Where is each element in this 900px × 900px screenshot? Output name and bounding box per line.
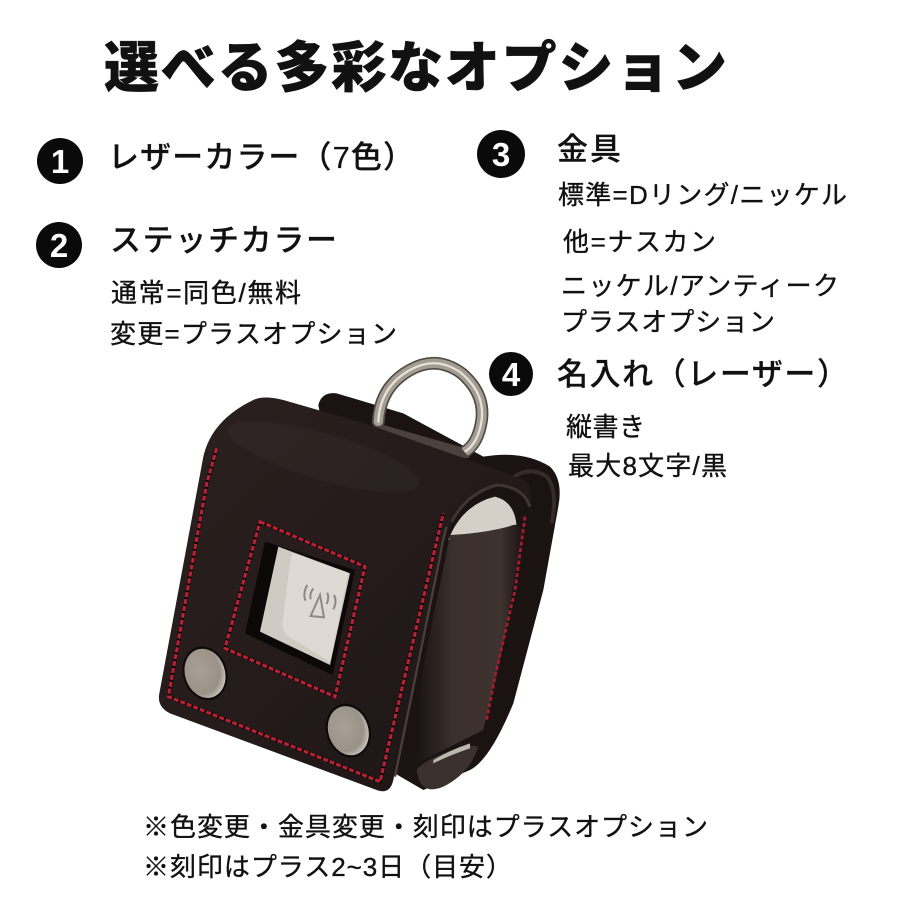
badge 2	[36, 222, 82, 268]
outer stitching	[168, 448, 443, 782]
snap button left	[176, 641, 234, 706]
stitch text: normal: 通常=同色/無料	[111, 278, 301, 308]
badge 4	[489, 352, 533, 396]
fittings text: standard: 標準=Dリング/ニッケル	[558, 180, 847, 210]
back strap	[318, 393, 560, 790]
badge 4: 4	[502, 356, 521, 393]
antenna icon	[304, 585, 336, 617]
engraving text: vertical: 縦書き	[566, 412, 645, 442]
badge 1	[37, 138, 83, 184]
badge 3	[477, 130, 525, 178]
side pocket	[416, 525, 522, 763]
badge 1: 1	[51, 143, 69, 180]
flap highlight	[221, 407, 426, 507]
section 2: stitch colour	[36, 222, 397, 349]
section 3: metal fittings	[477, 130, 847, 337]
section 4: name engraving	[489, 352, 848, 481]
stitch text: change: 変更=プラスオプション	[110, 319, 397, 349]
heading: stitch colour: ステッチカラー	[110, 223, 337, 258]
metal tab	[367, 425, 470, 458]
snap button right	[319, 698, 378, 763]
white device body	[448, 497, 517, 540]
badge 3: 3	[492, 136, 510, 173]
fittings text: plus option: プラスオプション	[561, 307, 775, 337]
fittings text: other: 他=ナスカン	[563, 227, 716, 257]
engraving text: limit: 最大8文字/黒	[568, 451, 727, 481]
footnote 2: ※刻印はプラス2~3日（目安）	[143, 852, 512, 882]
heading: metal fittings: 金具	[557, 132, 621, 167]
side stitching	[487, 517, 525, 720]
title: 選べる多彩なオプション	[104, 37, 727, 99]
fittings text: finishes: ニッケル/アンティーク	[561, 271, 839, 301]
metal ring	[378, 363, 482, 452]
heading: leather colour: レザーカラー（7色）	[108, 140, 414, 175]
window recess	[245, 542, 355, 675]
footnote 1: ※色変更・金具変更・刻印はプラスオプション	[143, 812, 708, 842]
product photo: leather case	[159, 363, 560, 791]
front flap	[159, 397, 531, 791]
device screen	[260, 547, 350, 665]
bottom opening	[417, 746, 478, 789]
badge 2: 2	[50, 227, 68, 264]
section 1: leather colour	[37, 138, 414, 184]
heading: name engraving: 名入れ（レーザー）	[557, 357, 848, 392]
window stitching	[225, 522, 365, 697]
